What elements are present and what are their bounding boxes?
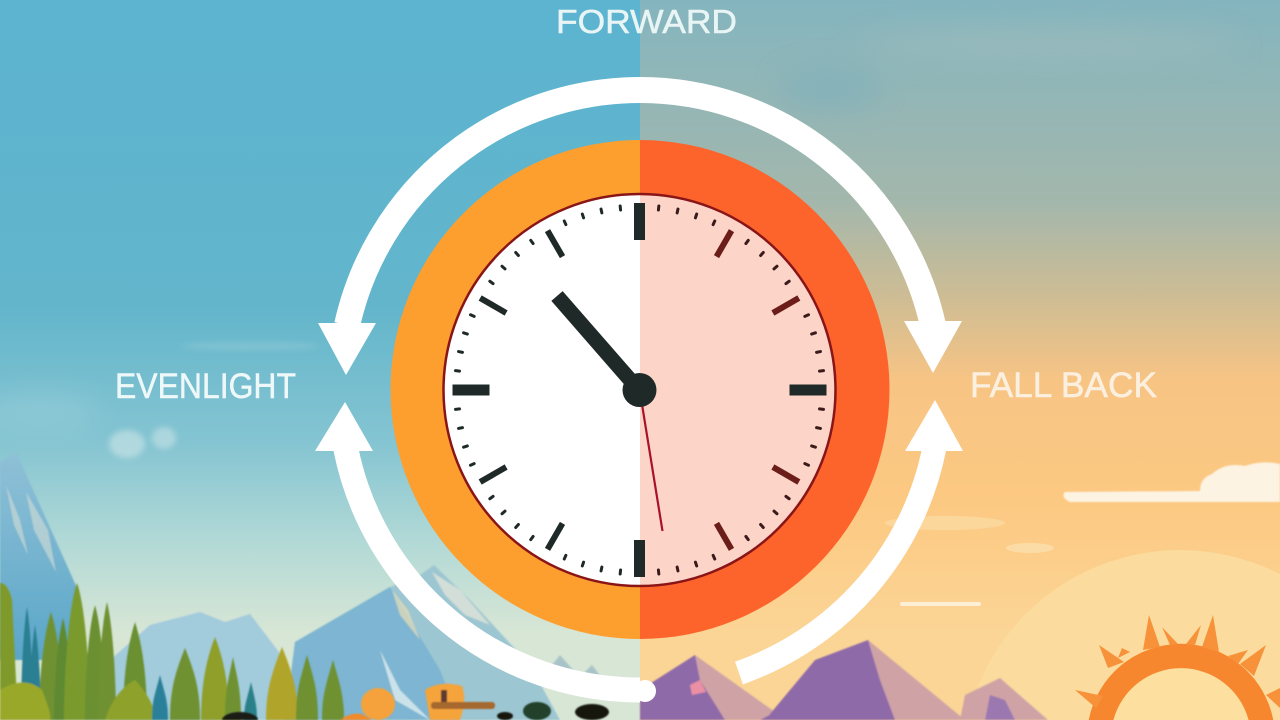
- clock ring: red-orange right half: [640, 140, 890, 639]
- icon: sun with rays: [1075, 615, 1280, 720]
- arrow: top arc from left to right: [318, 90, 962, 375]
- clock ring: orange left half: [390, 140, 640, 639]
- clock: [390, 140, 890, 639]
- clouds in right sky: [885, 462, 1280, 606]
- panel: left cool sky background: [0, 0, 640, 720]
- label: evenlight: EVENLIGHT: [115, 367, 296, 406]
- clock face outline: [444, 194, 836, 586]
- minute ticks left: [456, 206, 621, 574]
- forest of trees: [0, 583, 344, 720]
- right purple mountains: [640, 640, 1048, 720]
- minute ticks right: [658, 206, 823, 574]
- hour hand: [557, 296, 639, 390]
- clock hub: [622, 373, 656, 407]
- hour ticks: [452, 203, 826, 577]
- arrowhead: left down: [318, 323, 376, 375]
- clock face: pink right half: [640, 194, 836, 586]
- faint clouds in upper right sky: [780, 31, 1240, 108]
- second hand: [640, 392, 662, 531]
- hikers and bushes at bottom: [222, 684, 609, 720]
- sun glow disc: [967, 550, 1280, 720]
- left mountains: [0, 452, 602, 720]
- faint clouds in left sky: [0, 342, 320, 458]
- arrow: lower left arc: [315, 402, 656, 702]
- arrow: lower right arc: [739, 400, 963, 673]
- label: fall back: FALL BACK: [970, 366, 1157, 405]
- panel: right warm sky background: [640, 0, 1280, 720]
- clock face: white left half: [444, 194, 640, 586]
- label: forward: FORWARD: [556, 3, 737, 40]
